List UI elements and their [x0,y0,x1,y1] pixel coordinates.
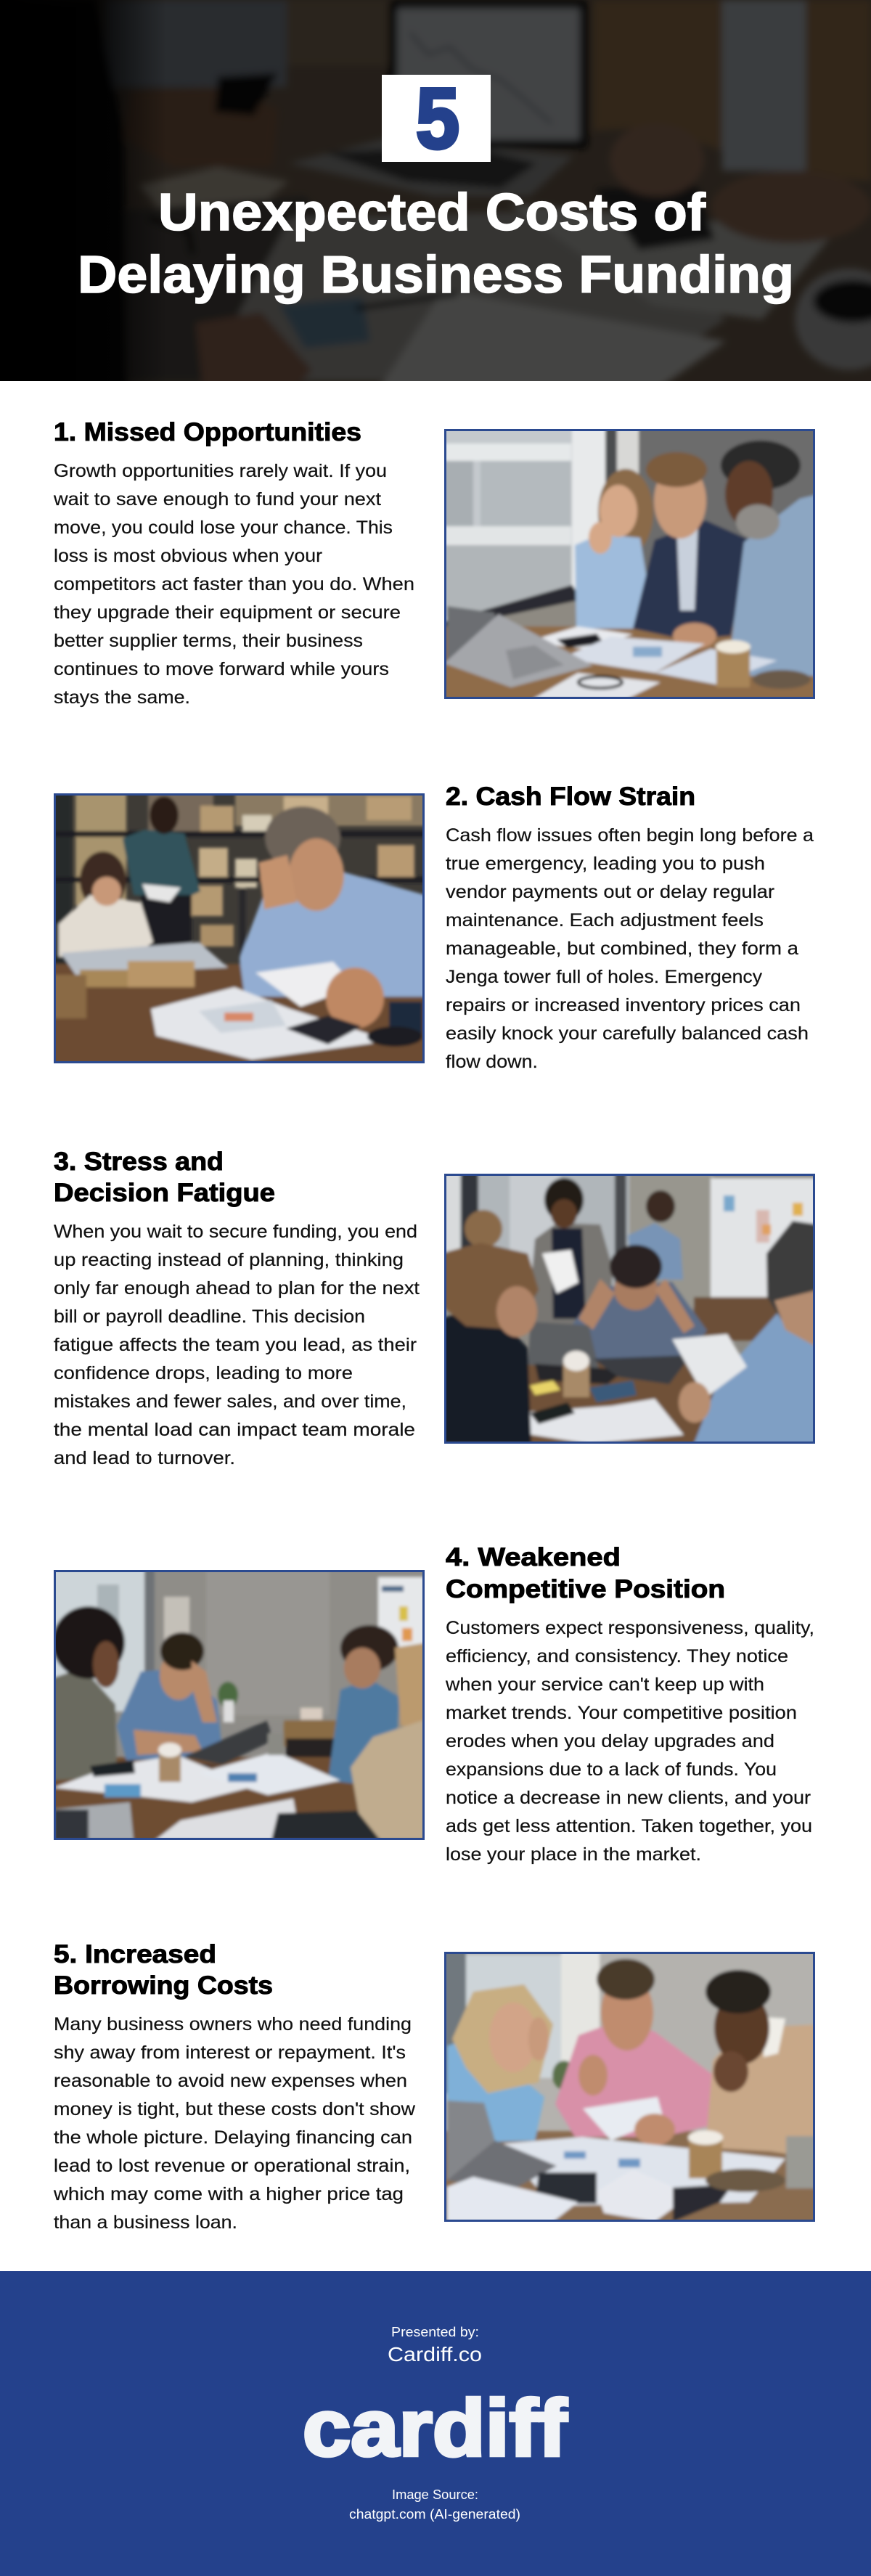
heading 5: Borrowing Costs [54,1971,273,2000]
image source credit: chatgpt.com (AI-generated) [349,2507,520,2522]
photo 1: three colleagues looking out a window [441,425,822,703]
number badge: 5: 5 [416,71,459,167]
body text 4: erodes when you delay upgrades and [446,1731,774,1751]
body text 1: they upgrade their equipment or secure [54,602,401,623]
footer panel [0,2271,871,2576]
presented by label: Presented by: [391,2324,479,2339]
body text 2: Cash flow issues often begin long before a [446,825,814,846]
body text 2: manageable, but combined, they form a [446,939,798,959]
body text 5: money is tight, but these costs don't show [54,2099,416,2119]
body text 3: mistakes and fewer sales, and over time, [54,1391,406,1412]
image source label: Image Source: [392,2487,478,2502]
body text 3: the mental load can impact team morale [54,1420,415,1440]
cardiff.co link text: Cardiff.co [388,2343,482,2366]
body text 2 [446,825,814,1072]
number badge: 5 [382,71,491,167]
section 1: missed opportunities [53,418,822,708]
body text 4: when your service can't keep up with [445,1675,764,1695]
heading 3: 3. Stress and [54,1148,224,1176]
body text 5: than a business loan. [54,2212,237,2233]
body text 1: Growth opportunities rarely wait. If you [54,461,387,481]
body text 5: which may come with a higher price tag [53,2184,404,2204]
heading 3: Decision Fatigue [54,1179,275,1207]
photo 4: meeting around a paper-covered table [50,1566,431,1844]
body text 4: Customers expect responsiveness, quality, [446,1618,814,1638]
body text 5: the whole picture. Delaying financing can [54,2127,412,2148]
heading 5 [54,1940,273,2000]
main title: Delaying Business Funding [78,246,794,304]
photo 3: overwhelmed team in office [441,1170,822,1448]
body text 3: When you wait to secure funding, you end [54,1222,417,1242]
body text 3: bill or payroll deadline. This decision [54,1307,365,1327]
body text 4: lose your place in the market. [446,1844,701,1865]
section 4: weakened competitive position [50,1543,814,1865]
body text 2: true emergency, leading you to push [446,854,765,874]
body text 5: shy away from interest or repayment. It's [54,2043,406,2063]
body text 5 [53,2014,416,2233]
body text 2: repairs or increased inventory prices can [446,995,801,1015]
body text 1 [53,461,414,708]
body text 3: only far enough ahead to plan for the next [54,1278,420,1299]
heading 3 [54,1148,275,1207]
body text 1: stays the same. [54,687,190,708]
body text 3: and lead to turnover. [54,1448,235,1468]
heading 1: 1. Missed Opportunities [54,418,361,446]
body text 2: maintenance. Each adjustment feels [446,910,764,931]
body text 1: move, you could lose your chance. This [54,518,393,538]
body text 4: notice a decrease in new clients, and your [446,1788,811,1808]
body text 4: market trends. Your competitive position [446,1703,797,1723]
heading 2: 2. Cash Flow Strain [446,782,695,811]
body text 1: loss is most obvious when your [54,546,322,566]
section 3: stress and decision fatigue [54,1148,822,1468]
main title [78,184,794,304]
body text 4: efficiency, and consistency. They notice [446,1646,788,1667]
body text 2: flow down. [446,1052,538,1072]
section 5: increased borrowing costs [53,1940,822,2233]
body text 3: confidence drops, leading to more [54,1363,353,1383]
body text 1: continues to move forward while yours [54,659,389,679]
cardiff logo wordmark: cardiff [303,2384,567,2473]
body text 1: better supplier terms, their business [54,631,363,651]
body text 1: competitors act faster than you do. When [54,574,414,594]
body text 3: fatigue affects the team you lead, as their [54,1335,417,1355]
body text 4: expansions due to a lack of funds. You [446,1759,777,1780]
body text 3: up reacting instead of planning, thinking [54,1250,404,1270]
photo 5: three people reviewing loan paperwork [441,1948,822,2225]
body text 2: easily knock your carefully balanced cash [446,1023,809,1044]
header banner [0,0,871,392]
body text 4: ads get less attention. Taken together, you [446,1816,812,1836]
body text 5: reasonable to avoid new expenses when [54,2071,407,2091]
section 2: cash flow strain [50,782,814,1072]
heading 4: 4. Weakened [446,1543,621,1571]
main title: Unexpected Costs of [158,184,706,242]
heading 4 [446,1543,725,1603]
body text 4 [445,1618,814,1865]
photo 2: stressed owner with invoice in stock room [50,790,431,1066]
heading 4: Competitive Position [446,1575,725,1603]
body text 2: vendor payments out or delay regular [446,882,774,902]
body text 1: wait to save enough to fund your next [53,489,381,510]
body text 2: Jenga tower full of holes. Emergency [446,967,763,987]
heading 5: 5. Increased [54,1940,216,1968]
hero photo: business team reviewing papers, darkened [0,0,871,381]
body text 5: Many business owners who need funding [54,2014,412,2035]
body text 5: lead to lost revenue or operational strain, [54,2156,410,2176]
body text 3 [54,1222,420,1468]
